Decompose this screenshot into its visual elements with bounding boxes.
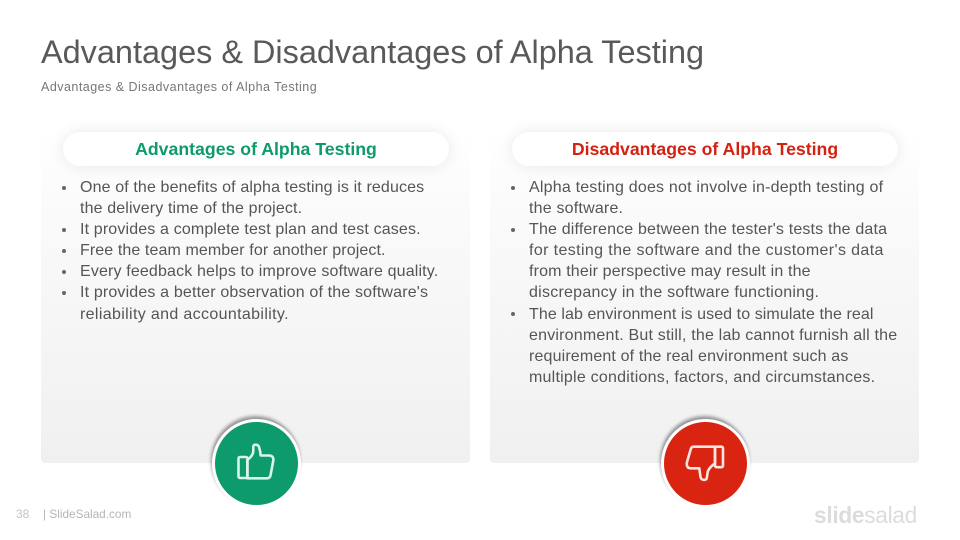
icon: thumbs up	[212, 419, 301, 508]
text block: advantages list: the delivery time of the project.	[80, 200, 302, 217]
text block: disadvantages list: environment. But still, the lab cannot furnish all the	[529, 327, 897, 344]
text block: disadvantages list: multiple conditions, factors, and circumstances.	[529, 369, 875, 386]
text block: advantages list: It provides a complete test plan and test cases.	[80, 221, 421, 238]
text block: disadvantages list: The lab environment is used to simulate the real	[529, 306, 873, 323]
text block: disadvantages list: discrepancy in the software functioning.	[529, 284, 819, 301]
text block: advantages list: Every feedback helps to improve software quality.	[80, 263, 438, 280]
text block: disadvantages list: Alpha testing does not involve in-depth testing of	[529, 179, 883, 196]
text block: advantages list: Free the team member for another project.	[80, 242, 386, 259]
heading: disadvantages: Disadvantages of Alpha Testing	[572, 139, 838, 159]
text block: disadvantages list: from their perspective may result in the	[529, 263, 811, 280]
text block: advantages list: reliability and accountability.	[80, 306, 289, 323]
page number: 38	[16, 507, 29, 521]
text block: advantages list	[62, 179, 438, 323]
text block: advantages list: It provides a better observation of the software's	[80, 284, 428, 301]
text block: advantages list: One of the benefits of alpha testing is it reduces	[80, 179, 424, 196]
icon: thumbs down	[661, 419, 750, 508]
heading: disadvantages	[512, 132, 898, 166]
title: Advantages & Disadvantages of Alpha Testing	[41, 34, 704, 70]
footer text: | SlideSalad.com	[43, 507, 131, 521]
text block: disadvantages list: the software.	[529, 200, 623, 217]
panel: disadvantages	[490, 130, 919, 463]
subtitle: Advantages & Disadvantages of Alpha Testing	[41, 80, 317, 94]
heading: advantages: Advantages of Alpha Testing	[135, 139, 377, 159]
text block: disadvantages list	[511, 179, 897, 386]
text block: disadvantages list: requirement of the real environment such as	[529, 348, 849, 365]
heading: advantages	[63, 132, 449, 166]
text block: disadvantages list: for testing the software and the customer's data	[529, 242, 884, 259]
logo: slidesalad: slidesalad	[814, 502, 917, 528]
text block: disadvantages list: The difference between the tester's tests the data	[529, 221, 887, 238]
panel: advantages	[41, 130, 470, 463]
